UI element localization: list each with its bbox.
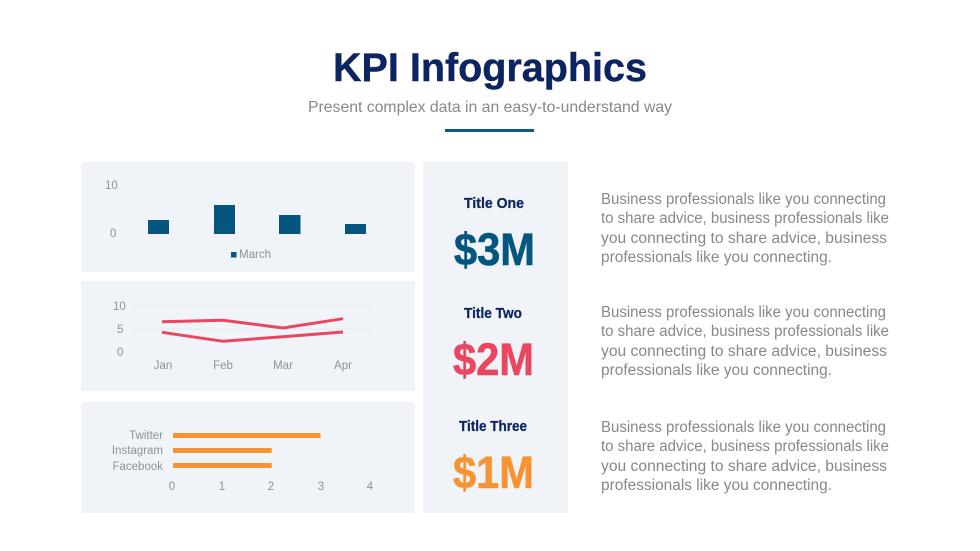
- panel: horizontal bar chart: [81, 402, 415, 513]
- x axis labels: Mar: [273, 360, 293, 372]
- text block two: to share advice, business professionals like: [601, 323, 889, 340]
- text block three: to share advice, business professionals like: [601, 438, 889, 455]
- text block two: Business professionals like you connecting: [601, 304, 886, 321]
- title: KPI Infographics: [333, 46, 647, 90]
- x axis labels: 1: [219, 481, 225, 493]
- text block one: to share advice, business professionals like: [601, 210, 889, 227]
- legend: March: [239, 249, 271, 261]
- text block one: [601, 191, 889, 266]
- panel: column chart: [81, 162, 415, 272]
- y axis labels: 10: [105, 180, 118, 192]
- x axis labels: 0: [169, 481, 175, 493]
- KPI two: [453, 306, 534, 385]
- category labels: [112, 430, 163, 473]
- header: [308, 46, 672, 132]
- x axis labels: 4: [367, 481, 374, 493]
- columns: [148, 205, 366, 234]
- text block three: professionals like you connecting.: [601, 477, 832, 494]
- KPI one: [454, 196, 535, 275]
- KPI three: [453, 419, 534, 498]
- x axis labels: Jan: [154, 360, 172, 372]
- x axis labels: Feb: [213, 360, 233, 372]
- KPI three: $1M: [453, 447, 534, 498]
- category labels: Twitter: [129, 430, 163, 442]
- y axis labels: 5: [117, 324, 123, 336]
- y axis labels: [105, 180, 118, 240]
- text block two: professionals like you connecting.: [601, 362, 832, 379]
- KPI three: Title Three: [459, 419, 527, 435]
- KPI one: $3M: [454, 224, 535, 275]
- y axis labels: 0: [117, 347, 123, 359]
- x axis labels: 3: [318, 481, 324, 493]
- text block two: you connecting to share advice, business: [601, 343, 887, 360]
- y axis labels: 10: [113, 301, 126, 313]
- KPI two: Title Two: [464, 306, 522, 322]
- text block two: [601, 304, 889, 379]
- panel: KPI values: [423, 162, 568, 513]
- category labels: Instagram: [112, 445, 163, 457]
- y axis labels: 0: [110, 228, 116, 240]
- text block one: Business professionals like you connecting: [601, 191, 886, 208]
- category labels: Facebook: [112, 461, 163, 473]
- y axis labels: [113, 301, 126, 359]
- x axis labels: 2: [268, 481, 274, 493]
- x axis labels: [169, 481, 374, 493]
- text block three: Business professionals like you connecting: [601, 419, 886, 436]
- orange bars: [173, 433, 320, 468]
- KPI one: Title One: [464, 196, 524, 212]
- text block one: you connecting to share advice, business: [601, 230, 887, 247]
- text block one: professionals like you connecting.: [601, 249, 832, 266]
- x axis labels: Apr: [334, 360, 352, 372]
- panel: line chart: [81, 281, 415, 391]
- KPI two: $2M: [453, 334, 534, 385]
- text block three: you connecting to share advice, business: [601, 458, 887, 475]
- title underline: [445, 129, 534, 132]
- red lines: [162, 319, 343, 341]
- subtitle: Present complex data in an easy-to-understand way: [308, 99, 672, 116]
- text block three: [601, 419, 889, 494]
- x axis labels: [154, 360, 352, 372]
